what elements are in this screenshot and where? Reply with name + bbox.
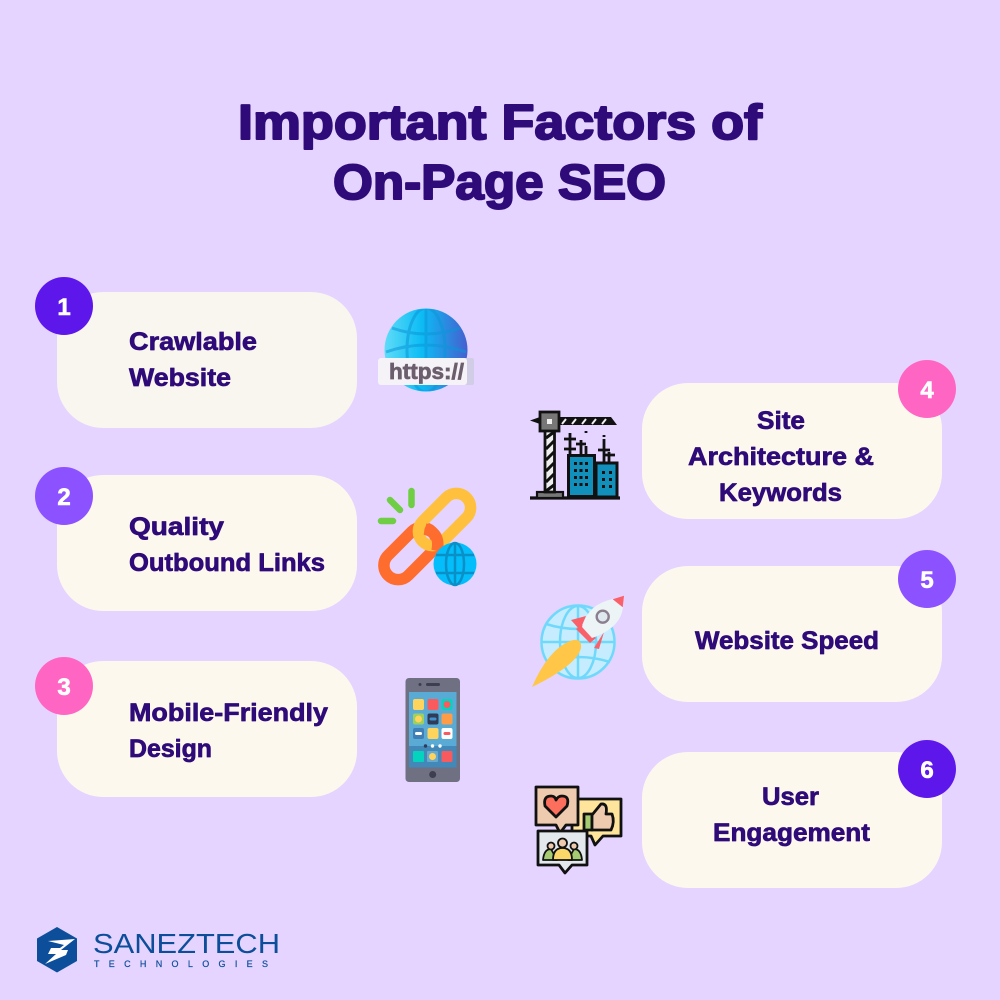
label: crawlable website bbox=[129, 328, 257, 392]
icon: social speech bubbles bbox=[536, 787, 621, 873]
logo: Saneztech Technologies bbox=[37, 927, 280, 972]
panel: user engagement bbox=[642, 740, 956, 888]
title: On-Page SEO bbox=[333, 156, 666, 210]
icon: smartphone bbox=[406, 678, 460, 782]
label: crawlable website: Website bbox=[129, 364, 231, 392]
tagline: TECHNOLOGIES bbox=[94, 959, 268, 969]
label: site architecture and keywords: Site bbox=[757, 407, 805, 435]
label: quality outbound links: Outbound Links bbox=[129, 549, 325, 577]
logo mark bbox=[37, 927, 77, 972]
label: quality outbound links: Quality bbox=[129, 513, 224, 541]
label: mobile-friendly design: Mobile-Friendly bbox=[129, 699, 328, 727]
badge 6: 6 bbox=[920, 757, 934, 784]
title bbox=[238, 96, 763, 210]
badge 3: 3 bbox=[57, 674, 71, 701]
icon: chain link with globe bbox=[378, 488, 476, 586]
badge 5 bbox=[898, 550, 956, 608]
badge 4: 4 bbox=[920, 377, 934, 404]
title: Important Factors of bbox=[238, 96, 763, 150]
panel: crawlable website bbox=[35, 277, 357, 428]
icon: crane and buildings bbox=[530, 412, 620, 498]
label: user engagement bbox=[713, 783, 871, 847]
panel: mobile-friendly design bbox=[35, 657, 357, 797]
label: site architecture and keywords: Architecture & bbox=[688, 443, 874, 471]
label: site architecture and keywords: Keywords bbox=[719, 479, 842, 507]
panel: website speed bbox=[642, 550, 956, 702]
wordmark: SANEZTECH bbox=[93, 928, 280, 959]
badge 2: 2 bbox=[57, 484, 71, 511]
label: user engagement: User bbox=[762, 783, 819, 811]
badge 3 bbox=[35, 657, 93, 715]
icon: https globe: https:// bbox=[389, 359, 464, 384]
label: site architecture and keywords bbox=[688, 407, 874, 507]
badge 1 bbox=[35, 277, 93, 335]
label: user engagement: Engagement bbox=[713, 819, 871, 847]
badge 2 bbox=[35, 467, 93, 525]
label: crawlable website: Crawlable bbox=[129, 328, 257, 356]
badge 1: 1 bbox=[57, 294, 71, 321]
label: website speed: Website Speed bbox=[695, 627, 879, 655]
badge 5: 5 bbox=[920, 567, 934, 594]
badge 4 bbox=[898, 360, 956, 418]
panel: quality outbound links bbox=[35, 467, 357, 611]
label: quality outbound links bbox=[129, 513, 325, 577]
panel: site architecture and keywords bbox=[642, 360, 956, 519]
icon: rocket over globe bbox=[532, 596, 624, 687]
icon: https globe bbox=[378, 308, 474, 392]
label: mobile-friendly design: Design bbox=[129, 735, 212, 763]
badge 6 bbox=[898, 740, 956, 798]
label: mobile-friendly design bbox=[129, 699, 328, 763]
